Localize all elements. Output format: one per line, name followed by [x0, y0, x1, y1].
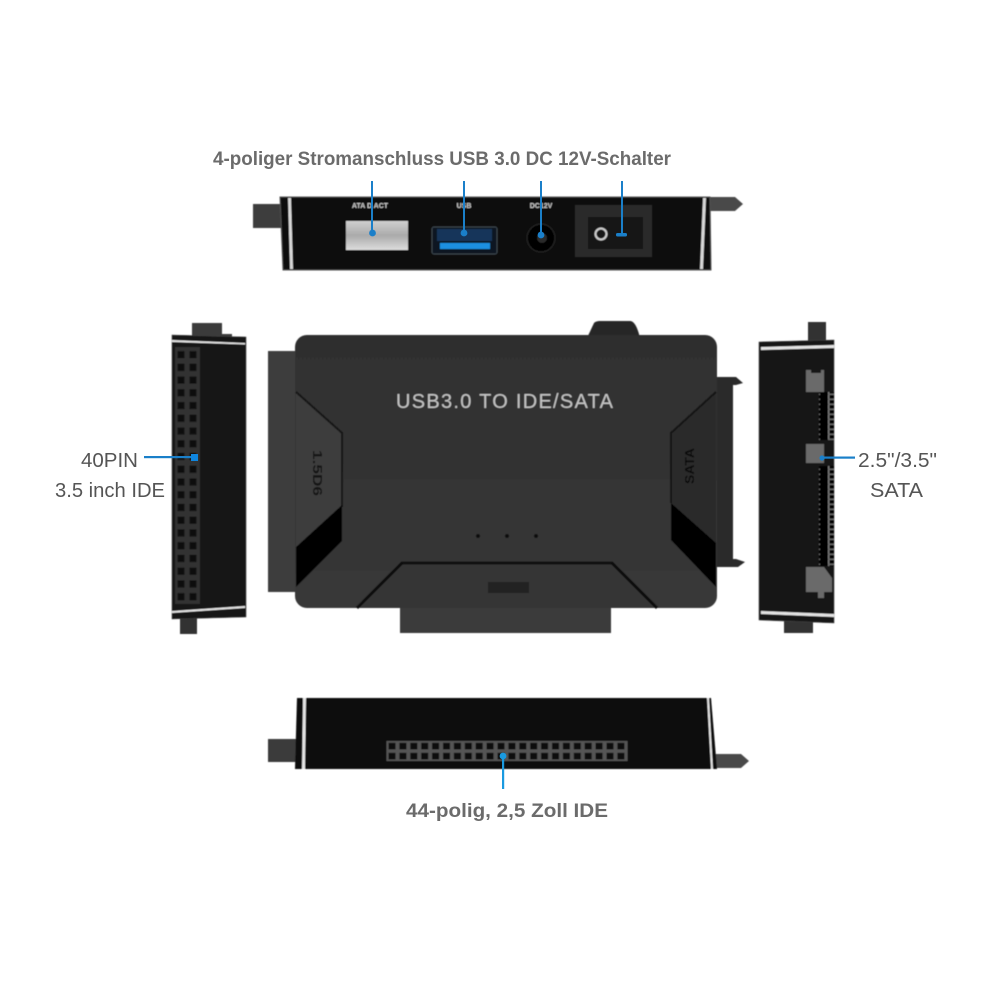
port silkscreen labels: USB [457, 203, 471, 210]
port silkscreen labels: ATA D ACT [352, 203, 389, 210]
port side housing [280, 197, 711, 270]
power rocker switch [575, 205, 652, 257]
DC 12V jack [527, 224, 555, 252]
40-pin connector [175, 347, 200, 604]
right panel outline [671, 392, 716, 503]
housing [172, 335, 246, 619]
label: 3.5 inch IDE: 3.5 inch IDE [55, 480, 165, 502]
right tab [714, 754, 749, 768]
right side panel [671, 392, 716, 586]
4-pin power socket [346, 221, 408, 250]
bottom tab [784, 616, 813, 633]
callout: 40 pin [144, 454, 198, 461]
left black wedge [296, 505, 342, 587]
right plug tab [706, 197, 743, 211]
left tab [268, 739, 298, 762]
housing [295, 698, 717, 769]
switch bump on top [587, 321, 640, 338]
housing top face [295, 335, 717, 608]
bottom tab [180, 615, 197, 634]
bottom connector block [400, 604, 611, 633]
right view: SATA side [759, 322, 834, 633]
top view: port side of adapter [253, 197, 743, 270]
left bright strip [302, 698, 306, 769]
callout: 4-pin power [369, 181, 376, 236]
top tab [192, 323, 232, 340]
callout: USB 3.0 [461, 181, 467, 236]
callout: switch [616, 181, 627, 236]
label: SATA: SATA [870, 480, 924, 502]
top tab [808, 322, 826, 342]
main adapter body [268, 321, 745, 633]
label: 44 pin IDE: 44-polig, 2,5 Zoll IDE [406, 801, 608, 822]
heading: top port labels: 4-poliger Stromanschluss USB 3.0 DC 12V-Schalter [213, 149, 672, 170]
right panel rotated label: SATA [682, 447, 697, 484]
white edge strips [172, 340, 245, 613]
left side panel [296, 392, 342, 586]
status LEDs [476, 534, 538, 538]
callout: 44 pin [500, 753, 506, 789]
product name: USB3.0 TO IDE/SATA [396, 391, 614, 413]
white edge strips [761, 345, 834, 617]
label: 40 pin IDE: 40PIN [81, 450, 138, 472]
left plug tab [253, 204, 281, 228]
callout lines and dots [144, 181, 855, 789]
left connector block [268, 351, 298, 592]
port silkscreen labels: DC12V [530, 203, 553, 210]
callout: SATA [819, 455, 855, 461]
SATA data and power slots [819, 392, 834, 566]
USB 3.0 port [432, 227, 497, 254]
port silkscreen labels [352, 203, 553, 210]
right bright edge strip [700, 198, 706, 269]
right SATA connector block [714, 377, 745, 567]
44-pin connector [386, 741, 628, 761]
housing [759, 340, 834, 623]
SATA gray guides [806, 370, 832, 598]
right black wedge [671, 503, 716, 587]
bottom view: 44-pin IDE side [268, 698, 749, 769]
left panel rotated label: 1.5D6 [310, 450, 325, 496]
bottom panel label [488, 582, 529, 593]
label: SATA size: 2.5"/3.5" [858, 450, 937, 472]
left view: 40-pin IDE side [172, 323, 246, 634]
left bright edge strip [288, 198, 293, 269]
left panel outline [296, 392, 342, 507]
callout: DC 12V [538, 181, 544, 238]
right bright strip [707, 698, 713, 769]
bottom panel outline [357, 563, 657, 608]
